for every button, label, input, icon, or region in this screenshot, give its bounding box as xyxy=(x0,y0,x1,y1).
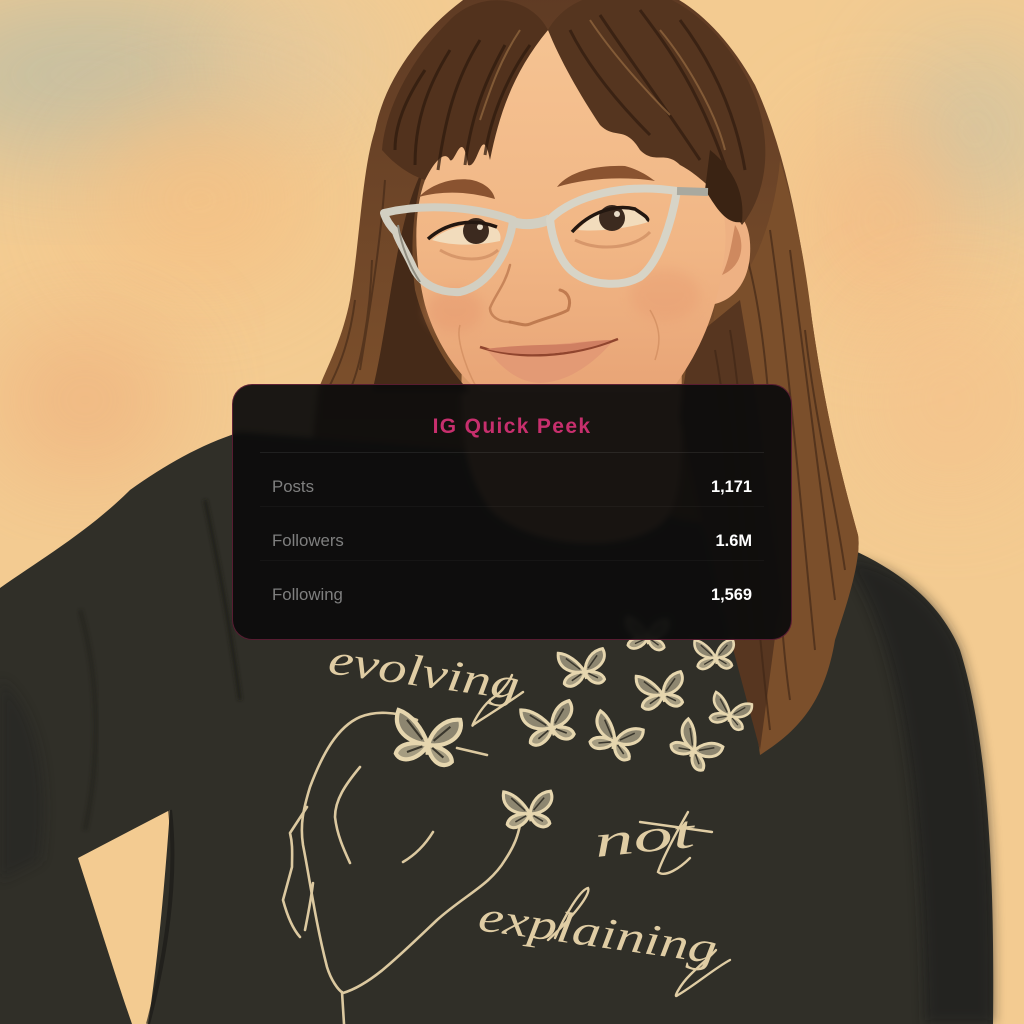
slogan flourishes xyxy=(472,675,730,996)
face xyxy=(416,30,726,392)
eyes xyxy=(428,205,650,259)
sweater body xyxy=(0,432,993,1024)
back hair xyxy=(300,0,859,755)
nose xyxy=(490,265,570,325)
stat row: followers: Followers xyxy=(272,531,344,550)
bangs and parting xyxy=(382,0,765,225)
stat row: followers: 1.6M xyxy=(716,532,752,550)
front hair over shoulder xyxy=(330,160,859,755)
neck xyxy=(461,360,682,544)
title divider xyxy=(260,452,764,453)
eyebrows xyxy=(419,166,655,199)
slogan word: evolving: evolving xyxy=(326,634,523,710)
stats card xyxy=(232,384,792,640)
stat row: posts: Posts xyxy=(272,477,314,496)
slogan word: explaining: explaining xyxy=(476,891,720,973)
sweater line art figure xyxy=(283,713,520,1024)
mouth xyxy=(459,310,659,392)
cheek shading xyxy=(427,288,483,332)
stat row: posts xyxy=(260,453,764,507)
ear xyxy=(696,212,750,305)
stat row: posts: 1,171 xyxy=(711,478,752,496)
stat row: following: 1,569 xyxy=(711,586,752,604)
stat row: following: Following xyxy=(272,585,343,604)
slogan word: not: not xyxy=(592,806,699,867)
stat row: following xyxy=(272,585,752,604)
sweater slogan xyxy=(326,634,720,973)
stat row: followers xyxy=(260,507,764,561)
card title: IG Quick Peek xyxy=(433,415,591,438)
sweater butterflies xyxy=(396,614,753,833)
glasses xyxy=(384,189,708,292)
